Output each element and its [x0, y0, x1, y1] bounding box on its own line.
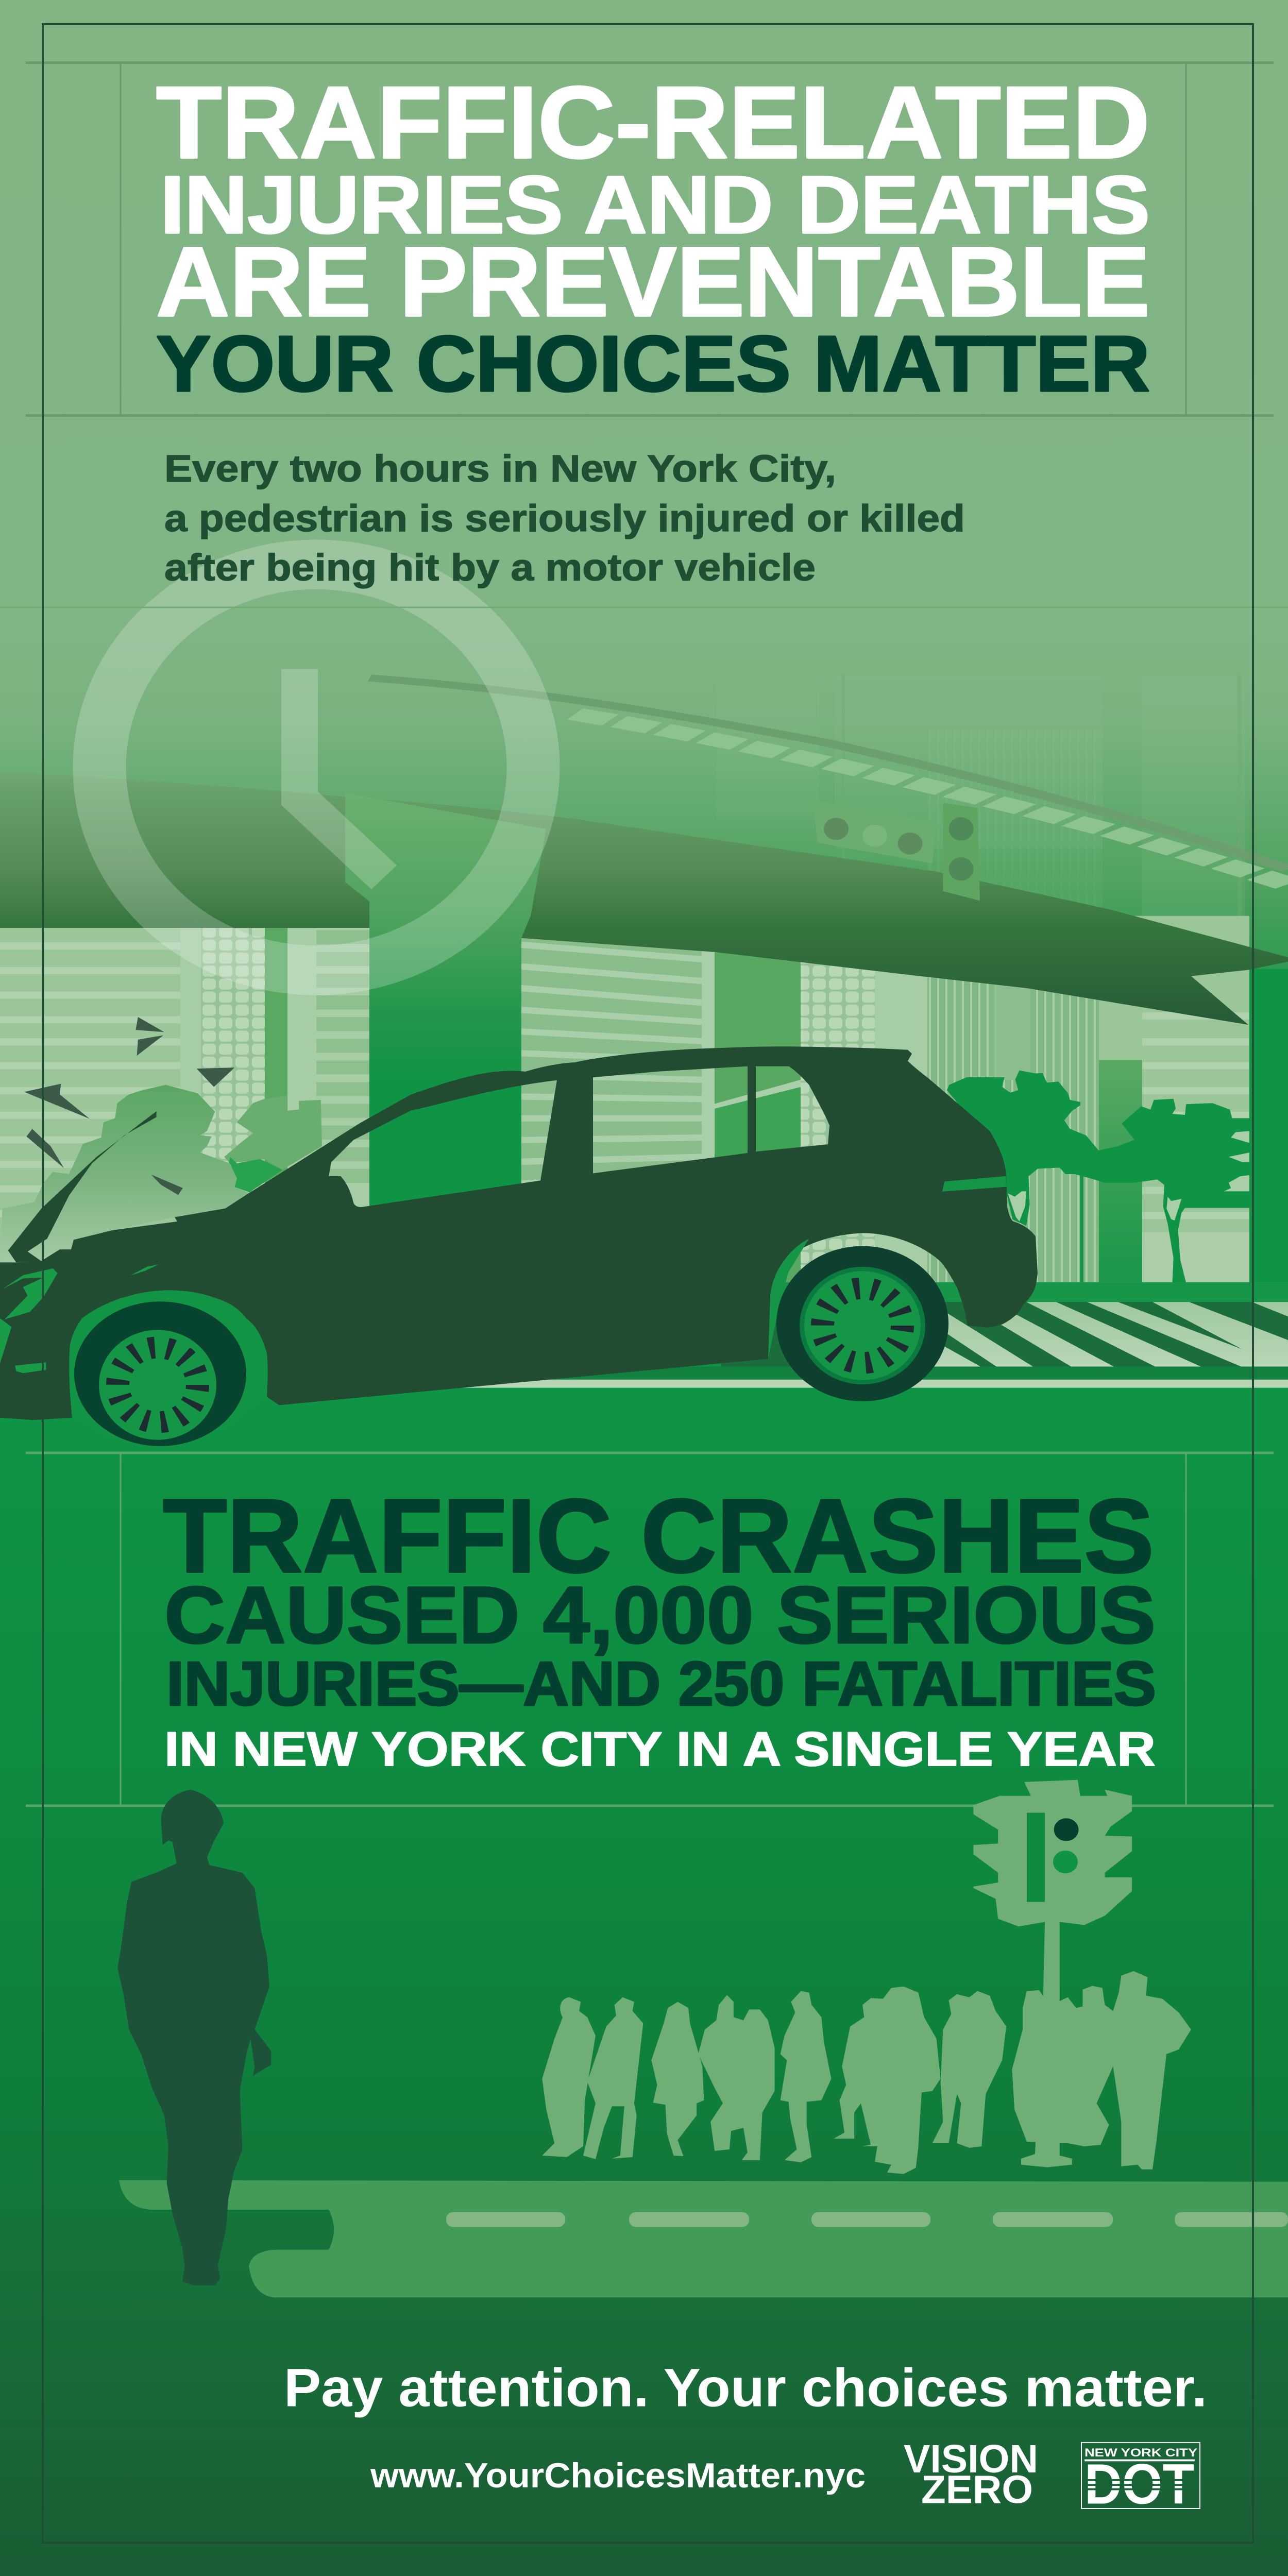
logo: New York City DOT: DOT — [1084, 2453, 1194, 2516]
intro text: Every two hours in New York City, — [164, 448, 836, 490]
intro text: after being hit by a motor vehicle — [164, 547, 816, 589]
buildings beneath the overpass — [0, 916, 1288, 1301]
closing tagline: Pay attention. Your choices matter. — [284, 2358, 1207, 2418]
road — [119, 2180, 1288, 2297]
logo: Vision Zero — [904, 2436, 1038, 2512]
title: YOUR CHOICES MATTER — [156, 319, 1150, 408]
headlight — [0, 1264, 159, 1373]
front wheel arch — [70, 1291, 268, 1446]
overhead traffic signal on the overpass — [813, 800, 980, 901]
logo: Vision Zero: VISION — [904, 2436, 1038, 2481]
statistic heading: INJURIES—AND 250 FATALITIES — [166, 1649, 1156, 1718]
logo: Vision Zero: ZERO — [921, 2467, 1033, 2512]
title — [156, 65, 1150, 408]
title: ARE PREVENTABLE — [156, 227, 1150, 337]
traffic light on pole — [973, 1780, 1132, 2167]
foliage behind the crashed hood — [0, 1085, 322, 1262]
statistic heading: IN NEW YORK CITY IN A SINGLE YEAR — [164, 1722, 1156, 1776]
trees on the right side — [947, 1071, 1249, 1283]
statistic heading: CAUSED 4,000 SERIOUS — [164, 1571, 1156, 1660]
car silhouette — [0, 1046, 1038, 1420]
scene: city skyline behind the overpass — [0, 675, 1288, 1388]
statistic heading — [163, 1478, 1156, 1776]
statistic heading: TRAFFIC CRASHES — [163, 1478, 1154, 1595]
car hood sprung open and front details — [0, 1017, 234, 1373]
rear wheel — [776, 1246, 948, 1401]
front wheel — [74, 1301, 246, 1446]
overpass rail and panels — [369, 678, 1288, 884]
flying glass shards — [24, 1017, 234, 1195]
ground and crosswalk — [453, 1282, 1288, 1388]
pedestrian silhouette — [117, 1790, 271, 2285]
intro text — [164, 448, 965, 589]
logo: New York City DOT: NEW YORK CITY — [1084, 2446, 1198, 2459]
guide lines — [0, 63, 1288, 1806]
title: INJURIES AND DEATHS — [160, 159, 1150, 250]
intro text: a pedestrian is seriously injured or killed — [164, 498, 965, 539]
crowd of pedestrians — [542, 1971, 1191, 2174]
overpass pylon — [345, 793, 546, 1301]
rear wheel arch — [768, 1239, 809, 1359]
title: TRAFFIC-RELATED — [156, 65, 1150, 179]
clock icon — [99, 565, 533, 970]
road lane dashes — [446, 2212, 1288, 2227]
overpass underside — [0, 772, 1288, 1025]
rear bumper stripe — [942, 1176, 1007, 1192]
website url: www.YourChoicesMatter.nyc — [370, 2456, 866, 2495]
